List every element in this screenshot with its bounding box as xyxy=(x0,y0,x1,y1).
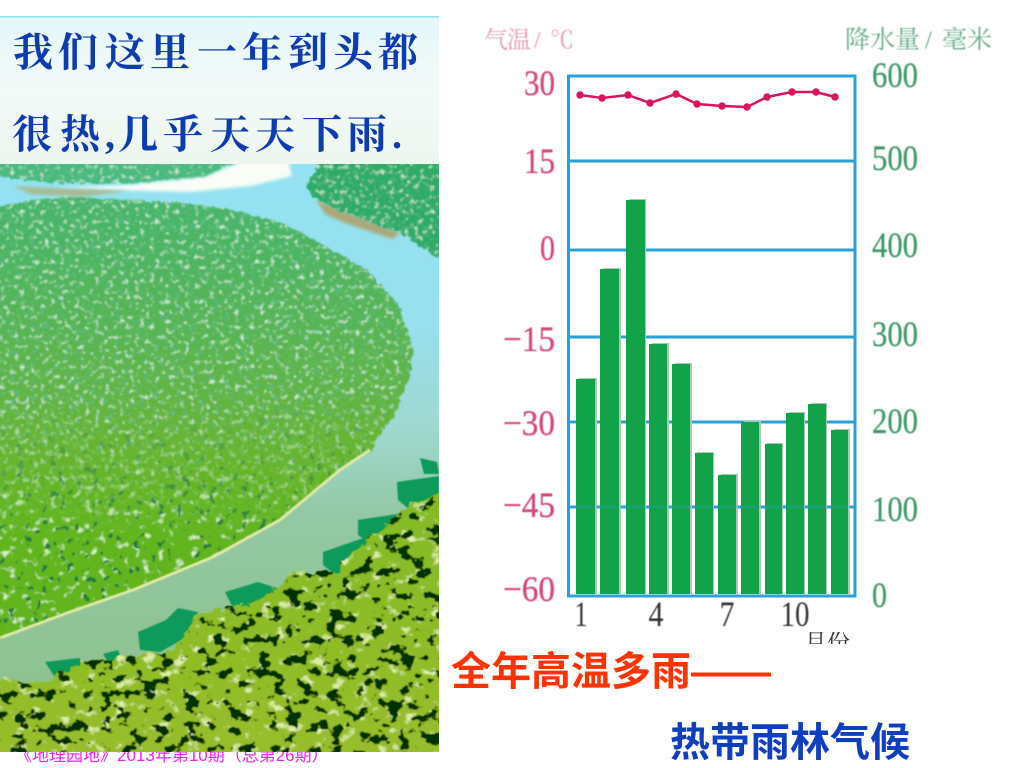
shoreline xyxy=(0,450,370,638)
climate chart xyxy=(484,26,992,655)
caption line 1: 我们这里一年到头都 xyxy=(13,30,418,75)
blue climate type text: 热带雨林气候 xyxy=(670,721,910,765)
temperature axis labels: 30 xyxy=(524,63,555,103)
tree shadows on water xyxy=(45,458,439,685)
precipitation axis title: 降水量/毫米 xyxy=(845,26,992,54)
darker lower canopy of central forest xyxy=(0,400,410,640)
upper left forest xyxy=(0,164,236,185)
lower forest xyxy=(0,490,446,760)
precipitation axis labels: 500 xyxy=(872,138,918,178)
precipitation axis labels xyxy=(872,55,918,615)
photo: rainforest and river xyxy=(0,164,439,752)
month axis labels: 4 xyxy=(648,594,664,634)
footer source credit: 《地理园地》2013年第10期（总第26期） xyxy=(15,746,329,765)
caption top edge xyxy=(0,16,439,18)
month axis labels: 10 xyxy=(780,594,810,634)
precipitation axis labels: 0 xyxy=(872,575,887,615)
precipitation axis labels: 400 xyxy=(872,225,918,265)
temperature axis labels: −30 xyxy=(503,403,555,443)
month axis labels: 1 xyxy=(574,594,588,634)
temperature axis labels xyxy=(503,63,555,609)
month axis labels xyxy=(574,594,810,634)
precipitation axis labels: 200 xyxy=(872,401,918,441)
caption line 2: 很热,几乎天天下雨. xyxy=(12,112,402,157)
temperature axis labels: −15 xyxy=(503,319,555,359)
month axis title, cropped: 月份 xyxy=(804,630,850,655)
temperature axis title: 气温/℃ xyxy=(484,27,574,54)
muddy bank right xyxy=(316,200,400,239)
precipitation bars xyxy=(570,199,853,594)
temperature axis labels: 0 xyxy=(540,228,555,268)
central forest xyxy=(0,197,413,640)
caption panel over photo xyxy=(0,16,439,164)
river water xyxy=(0,164,439,708)
red conclusion text: 全年高温多雨—— xyxy=(451,650,771,694)
precipitation axis labels: 300 xyxy=(872,314,918,354)
precipitation axis labels: 600 xyxy=(872,55,918,95)
grid and frame xyxy=(568,76,855,596)
sandbar xyxy=(52,160,292,192)
temperature axis labels: −45 xyxy=(503,485,555,525)
upper right forest xyxy=(306,164,439,259)
caption background xyxy=(0,16,439,164)
muddy bank left xyxy=(13,186,130,197)
temperature line xyxy=(576,88,839,111)
temperature axis labels: 15 xyxy=(524,141,555,181)
precipitation axis labels: 100 xyxy=(872,489,918,529)
temperature axis labels: −60 xyxy=(503,569,555,609)
month axis labels: 7 xyxy=(720,594,734,634)
